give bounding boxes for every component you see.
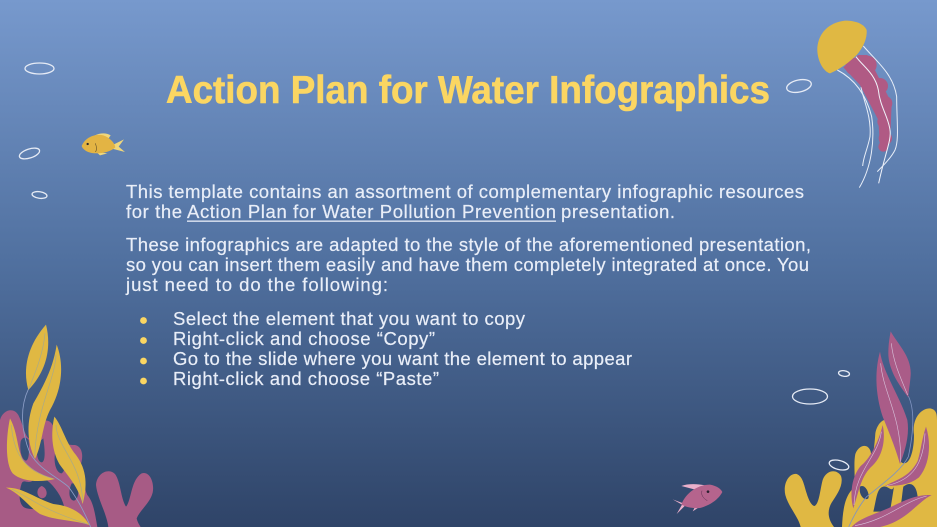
bullet list <box>140 308 632 389</box>
icon: yellow fish <box>82 133 125 155</box>
bubbles <box>18 63 850 472</box>
coral: right pink <box>96 471 153 527</box>
text block: intro <box>126 181 804 222</box>
bullet list: Right-click and choose “Paste” <box>173 368 439 389</box>
leaves <box>888 331 911 397</box>
text block: intro: presentation. <box>561 201 675 222</box>
seaweed: left corner <box>0 325 153 527</box>
icon: pink fish <box>673 484 722 514</box>
bullet list: Go to the slide where you want the element to appear <box>173 348 632 369</box>
coral: right yellow <box>785 471 842 527</box>
title: Action Plan for Water Infographics <box>166 69 770 112</box>
text block: instructions: just need to do the following: <box>125 274 388 295</box>
text block: intro: for the <box>126 201 182 222</box>
stem <box>23 389 91 527</box>
text block: intro: This template contains an assortment of complementary infographic resources <box>126 181 804 202</box>
text block: instructions: so you can insert them easily and have them completely integrated at once. You <box>126 254 809 275</box>
stem <box>849 396 913 527</box>
text block: instructions <box>125 234 811 295</box>
coral: left pink <box>0 410 97 527</box>
bullet list: Select the element that you want to copy <box>173 308 526 329</box>
icon: jellyfish <box>817 21 897 188</box>
leaves <box>26 325 48 390</box>
text block: instructions: These infographics are adapted to the style of the aforementioned presentation, <box>126 234 811 255</box>
bullet list: Right-click and choose “Copy” <box>173 328 435 349</box>
veins <box>854 343 927 526</box>
seaweed: right corner <box>785 331 937 527</box>
veins <box>11 333 87 524</box>
text block: intro: Action Plan for Water Pollution Prevention <box>187 201 556 222</box>
